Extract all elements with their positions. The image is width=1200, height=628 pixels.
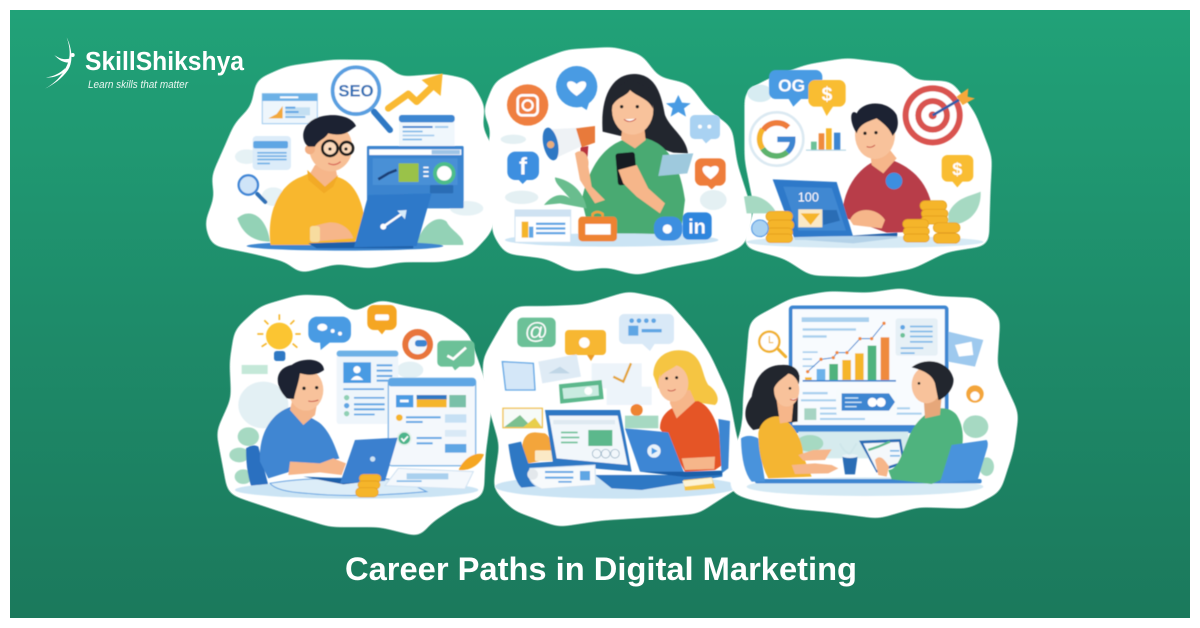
coins <box>356 474 381 497</box>
info card <box>896 318 938 356</box>
title: Career Paths in Digital Marketing <box>345 551 857 587</box>
document tray <box>508 442 595 488</box>
icon: Facebook <box>507 152 539 184</box>
lower lines <box>804 407 922 420</box>
chart card <box>515 210 571 242</box>
brand name: SkillShikshya <box>85 48 245 76</box>
hand on laptop <box>682 457 715 470</box>
panel: email and content marketer <box>483 292 750 527</box>
icon: small magnifier <box>239 175 265 202</box>
chair: right <box>940 440 988 483</box>
orange bubble <box>367 305 397 334</box>
pale background shapes <box>235 149 483 216</box>
dollar bubble: $ <box>822 85 833 106</box>
orange check <box>613 363 631 382</box>
icon: eye badge <box>654 217 682 241</box>
tagline: Learn skills that matter <box>88 79 189 91</box>
chart card <box>262 94 317 124</box>
panel: content and web marketer <box>217 295 492 537</box>
dashboard screen <box>367 146 464 208</box>
leaves <box>744 192 981 225</box>
paper sheet <box>385 468 473 489</box>
info card <box>527 465 596 489</box>
icon: Instagram <box>507 84 548 126</box>
chair: left <box>741 436 765 482</box>
icon: megaphone <box>540 126 595 169</box>
icon: orange heart bubble <box>695 158 726 189</box>
desk surface <box>495 472 738 499</box>
chair <box>718 419 730 473</box>
icon: dancer swoosh <box>45 37 75 89</box>
green check card <box>437 341 475 370</box>
trend line <box>806 322 886 373</box>
orange bubble <box>565 330 606 361</box>
leaves <box>229 427 259 484</box>
person: man in red sweater <box>842 104 932 233</box>
icon: heart bubble <box>556 66 597 110</box>
small objects <box>625 404 658 428</box>
bar chart <box>803 337 896 382</box>
icon: growth arrow <box>388 73 443 108</box>
laptop <box>303 438 398 484</box>
icon: SEO magnifier: SEO <box>338 82 374 101</box>
dollar bubble small: $ <box>952 159 962 179</box>
icon: star <box>666 95 691 117</box>
panel: social media manager <box>483 47 753 275</box>
white blob backdrop <box>730 288 1018 518</box>
highlight card <box>836 388 897 416</box>
person: man in green <box>875 361 963 484</box>
person: man in blue shirt <box>260 360 346 478</box>
leaves <box>797 415 994 476</box>
icon: clock magnifier <box>759 332 786 357</box>
white blob backdrop <box>217 295 492 537</box>
icon: map <box>502 362 535 390</box>
yellow note <box>682 477 716 491</box>
social card <box>658 153 693 176</box>
panel: SEO specialist <box>205 60 498 273</box>
laptop <box>308 193 432 248</box>
pale clouds <box>501 135 727 210</box>
icon: chat bubble <box>690 115 720 143</box>
icon: light bulb <box>257 314 301 361</box>
icon: at sign card: @ <box>524 318 548 344</box>
panel: analytics consultation <box>730 288 1018 518</box>
icon: target with arrow <box>903 85 975 145</box>
laptop: 100 <box>798 191 819 205</box>
logo <box>45 37 245 91</box>
icon: Google <box>750 112 803 166</box>
OG bubble: OG <box>778 75 805 95</box>
bar chart <box>806 128 846 151</box>
chair <box>246 445 270 492</box>
icon: orange briefcase <box>578 212 617 241</box>
white blob backdrop <box>743 58 992 277</box>
icon: LinkedIn <box>683 212 712 240</box>
tablet <box>859 439 905 473</box>
orange swirl icon <box>459 454 484 470</box>
monitor <box>791 307 947 458</box>
orange folder <box>522 432 553 463</box>
icon: orange circle <box>402 329 433 360</box>
person: woman with blonde hair <box>653 350 722 472</box>
gallery image <box>503 408 542 428</box>
person: man in yellow sweater <box>270 115 365 245</box>
laptop <box>625 428 722 477</box>
light cloud <box>747 85 773 102</box>
cup <box>840 443 858 474</box>
icon: SEO magnifier <box>333 67 390 130</box>
profile card <box>337 351 398 424</box>
desk <box>235 478 478 499</box>
laptop <box>773 179 897 243</box>
white blob backdrop <box>205 60 498 273</box>
icon: envelope badge <box>948 332 983 367</box>
dashboard card <box>388 378 476 466</box>
pale background shapes <box>238 362 423 428</box>
coins: right stacks <box>903 201 960 243</box>
document card <box>399 115 455 147</box>
white blob backdrop <box>483 292 750 527</box>
chat bubble <box>308 317 351 350</box>
white blob backdrop <box>483 47 753 275</box>
desk shadow <box>247 241 443 251</box>
dollar bubble small <box>942 155 973 187</box>
dollar bubble <box>808 80 846 116</box>
icon: at sign card <box>517 318 556 347</box>
person: woman with hair <box>575 74 688 240</box>
icon: LinkedIn: in <box>688 216 706 238</box>
pale cards <box>592 363 652 405</box>
panel: PPC and paid ads specialist <box>743 58 992 277</box>
desk <box>747 477 983 496</box>
browser card <box>253 136 291 170</box>
person: woman in yellow <box>745 365 838 478</box>
OG bubble <box>769 70 822 107</box>
light blue bubble <box>619 314 674 351</box>
coins: left stack <box>766 211 794 243</box>
icon: Facebook: f <box>519 154 528 181</box>
green card <box>559 380 604 404</box>
leaves <box>237 213 463 245</box>
small green tag <box>242 365 268 374</box>
image card <box>538 354 581 383</box>
icon: orange head badge <box>966 385 984 403</box>
tablet monitor <box>545 410 632 472</box>
text lines <box>801 317 869 401</box>
desk shadow <box>505 233 718 247</box>
desk shadow <box>747 236 983 248</box>
plant <box>544 177 587 208</box>
small badge <box>752 220 768 237</box>
